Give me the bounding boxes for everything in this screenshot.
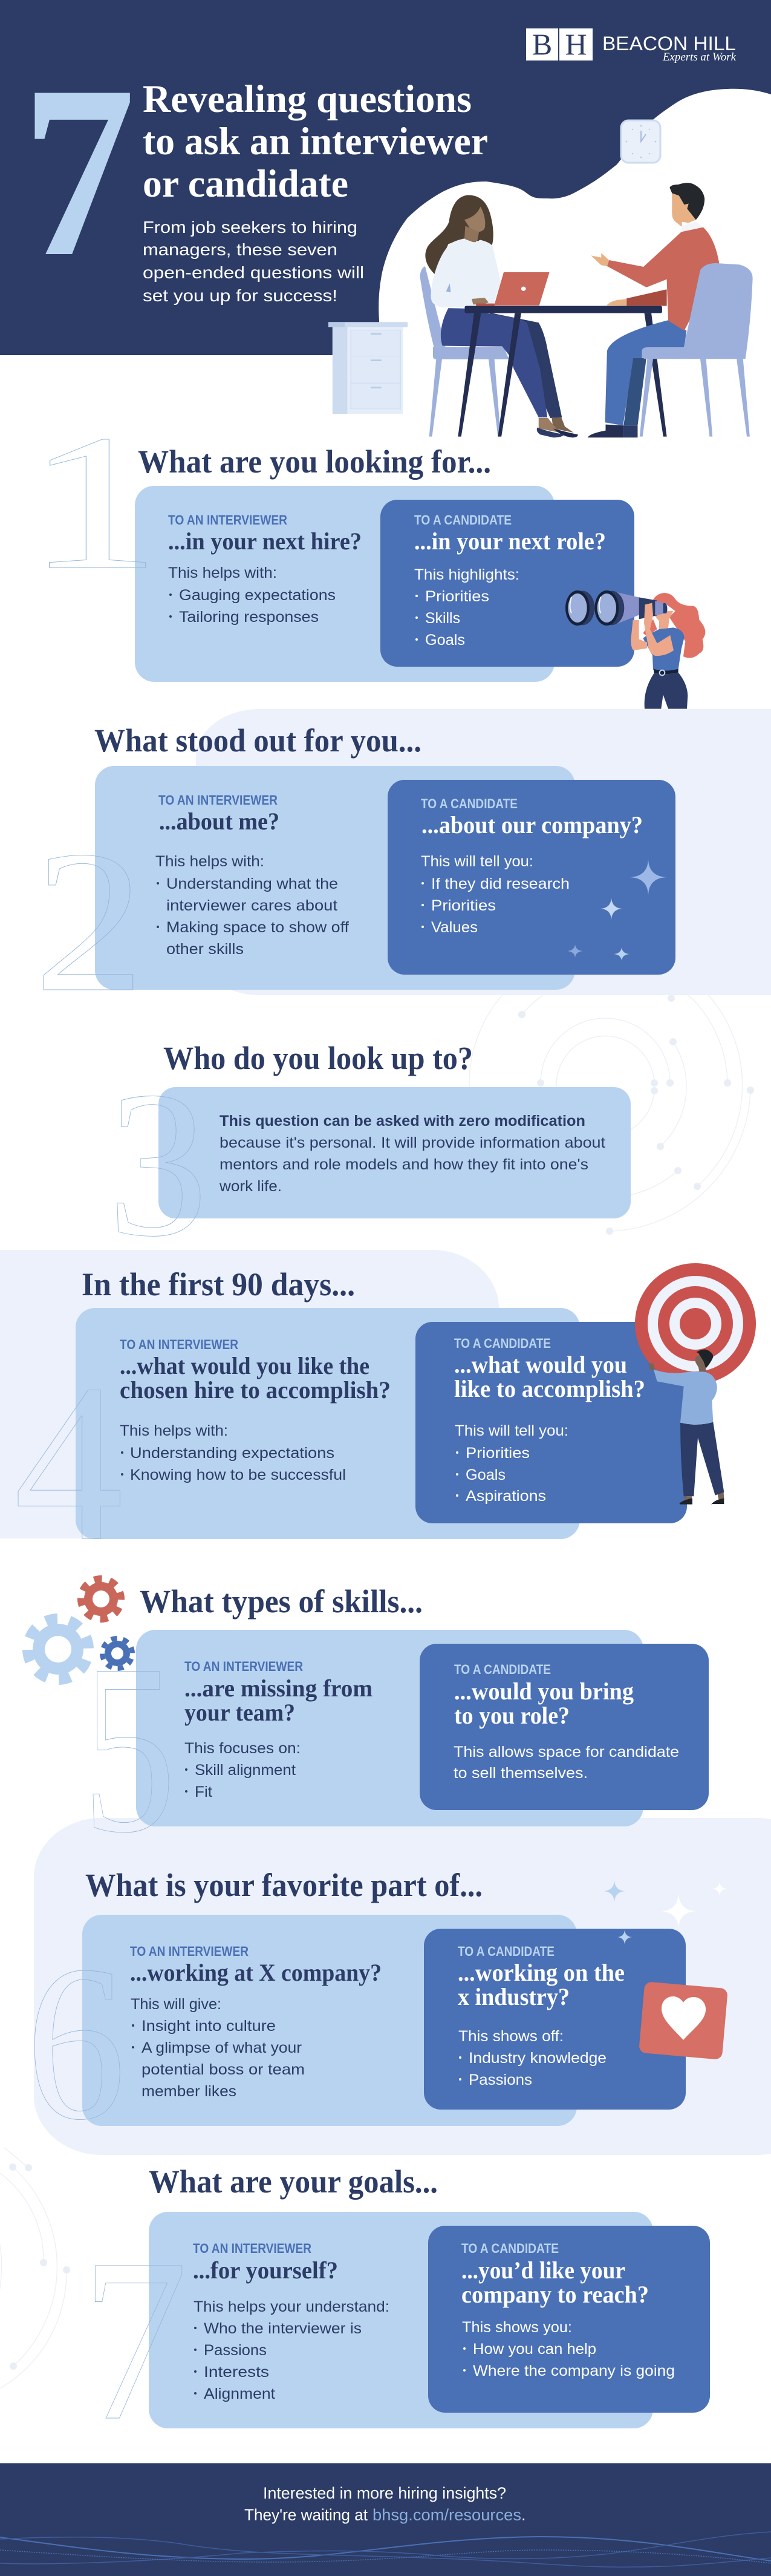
logo: B <box>532 27 552 61</box>
illustration: person holding target <box>649 1350 724 1505</box>
intro text: From job seekers to hiring <box>143 218 357 237</box>
interviewer text: Insight into culture <box>142 2018 276 2035</box>
candidate text: x industry? <box>458 1983 570 2010</box>
big number 7: 7 <box>22 35 135 308</box>
header background with white blob <box>0 0 771 355</box>
table top <box>464 306 662 313</box>
section 2 <box>34 722 675 1034</box>
candidate text: How you can help <box>473 2341 596 2358</box>
heading: What is your favorite part of... <box>85 1867 483 1903</box>
interviewer text <box>120 1337 391 1483</box>
panel: interviewer <box>76 1308 580 1539</box>
interviewer text: TO AN INTERVIEWER <box>168 512 287 528</box>
call to action text: Interested in more hiring insights? <box>263 2484 506 2502</box>
icon: wall clock <box>621 120 660 163</box>
candidate text: TO A CANDIDATE <box>458 1944 555 1959</box>
decorative circuit dots <box>518 995 754 1235</box>
interviewer text: Understanding what the <box>166 875 338 892</box>
number 1: 1 <box>25 395 162 610</box>
interviewer text: potential boss or team <box>142 2061 305 2078</box>
heading: Who do you look up to? <box>163 1040 473 1076</box>
panel: interviewer <box>136 1630 643 1826</box>
section 6 <box>26 1867 728 2166</box>
interviewer text: Passions <box>204 2342 267 2359</box>
candidate text: ...what would you <box>454 1351 627 1378</box>
candidate text: ...you’d like your <box>461 2257 625 2284</box>
decorative section 2 background <box>196 709 771 995</box>
candidate text: Priorities <box>466 1445 530 1462</box>
panel: candidate <box>424 1929 686 2110</box>
panel: interviewer <box>82 1915 577 2126</box>
interviewer text: Alignment <box>204 2385 275 2402</box>
candidate text: like to accomplish? <box>454 1375 645 1402</box>
section 5 <box>18 1574 709 1883</box>
title: Revealing questions <box>143 77 472 121</box>
heading: What are you looking for... <box>138 443 491 480</box>
interviewer text: This focuses on: <box>184 1740 301 1757</box>
interviewer text: ...what would you like the <box>120 1352 369 1379</box>
body text: mentors and role models and how they fit into one's <box>220 1156 588 1173</box>
interviewer text: TO AN INTERVIEWER <box>120 1337 238 1352</box>
candidate text: This will tell you: <box>455 1422 568 1439</box>
candidate text <box>458 1944 625 2088</box>
candidate text: ...working on the <box>458 1959 625 1986</box>
table legs <box>458 313 667 437</box>
body text <box>219 1113 605 1195</box>
number 3: 3 <box>108 1048 208 1280</box>
interviewer text <box>193 2241 389 2402</box>
interviewer text: chosen hire to accomplish? <box>120 1376 391 1404</box>
footer <box>0 2463 771 2576</box>
interviewer text: Gauging expectations <box>179 587 336 604</box>
candidate text: to you role? <box>454 1702 570 1729</box>
decorative circuit arcs bottom left <box>0 2148 70 2388</box>
icon: sparkles <box>603 1880 727 1944</box>
panel <box>158 1087 631 1218</box>
interviewer text: ...are missing from <box>184 1675 372 1702</box>
candidate text: This will tell you: <box>421 853 533 870</box>
candidate text: If they did research <box>431 875 570 892</box>
interviewer text: member likes <box>142 2083 236 2100</box>
interviewer text: This will give: <box>131 1996 221 2013</box>
interviewer text: Interests <box>204 2364 269 2381</box>
woman's chair <box>420 266 509 437</box>
interviewer text: Skill alignment <box>195 1762 296 1779</box>
logo <box>526 27 737 64</box>
decorative section 4 background <box>0 1250 499 1538</box>
candidate text: Priorities <box>431 897 496 914</box>
panel: interviewer <box>95 766 575 990</box>
candidate text: TO A CANDIDATE <box>414 512 512 528</box>
man's chair <box>640 263 753 437</box>
candidate text: Where the company is going <box>473 2362 675 2379</box>
decorative waves <box>0 2532 771 2567</box>
candidate text: This allows space for candidate <box>454 1744 679 1760</box>
candidate text: This highlights: <box>414 566 519 583</box>
title <box>143 77 488 206</box>
interviewer text <box>130 1944 382 2100</box>
interviewer text: ...about me? <box>159 808 279 835</box>
panel: candidate <box>388 780 675 975</box>
logo: Experts at Work <box>662 51 737 64</box>
number 5: 5 <box>82 1614 176 1883</box>
heading: What types of skills... <box>140 1583 423 1620</box>
call to action text: . <box>521 2506 526 2524</box>
candidate text: TO A CANDIDATE <box>461 2241 559 2256</box>
heading: What stood out for you... <box>94 722 421 759</box>
candidate text: to sell themselves. <box>454 1765 588 1782</box>
interviewer text: Knowing how to be successful <box>130 1466 346 1483</box>
candidate text: TO A CANDIDATE <box>454 1662 551 1677</box>
interviewer text: ...for yourself? <box>193 2257 338 2284</box>
panel: candidate <box>415 1322 687 1523</box>
candidate text: Passions <box>469 2071 532 2088</box>
interviewer text: TO AN INTERVIEWER <box>193 2241 311 2256</box>
candidate text: This shows off: <box>458 2028 564 2045</box>
call to action text: bhsg.com/resources <box>372 2506 521 2524</box>
illustration: interview at a table <box>420 183 753 437</box>
candidate text: ...about our company? <box>421 811 643 839</box>
number 6: 6 <box>26 1920 126 2166</box>
logo: H <box>565 27 587 61</box>
panel: candidate <box>380 500 634 667</box>
heading: What are your goals... <box>149 2163 438 2200</box>
interviewer text: other skills <box>166 941 244 958</box>
interviewer text: A glimpse of what your <box>142 2039 302 2056</box>
icon: light blue gear <box>18 1609 98 1689</box>
panel: interviewer <box>149 2212 653 2428</box>
icon: red gear <box>76 1574 126 1624</box>
icon: sparkles <box>567 859 667 961</box>
candidate text: Goals <box>425 632 465 649</box>
number 4: 4 <box>14 1338 123 1587</box>
interviewer text <box>155 793 349 958</box>
section 4 <box>14 1263 756 1587</box>
number 7: 7 <box>81 2211 188 2469</box>
candidate text: TO A CANDIDATE <box>421 796 518 811</box>
call to action text: They're waiting at <box>244 2506 368 2524</box>
decorative section 6 background <box>34 1818 771 2155</box>
candidate text: This shows you: <box>462 2319 572 2336</box>
call to action text <box>244 2484 526 2524</box>
icon: heart badge <box>639 1981 728 2060</box>
interviewer text: TO AN INTERVIEWER <box>184 1659 303 1674</box>
candidate text <box>461 2241 675 2379</box>
candidate text: Values <box>431 919 478 936</box>
panel: candidate <box>428 2226 710 2413</box>
heading: In the first 90 days... <box>82 1266 355 1303</box>
interviewer text: Making space to show off <box>166 919 349 936</box>
candidate text: ...would you bring <box>454 1678 634 1705</box>
interviewer text <box>184 1659 372 1800</box>
candidate text: Skills <box>425 610 460 627</box>
interviewer text: This helps your understand: <box>194 2298 389 2315</box>
interviewer text: This helps with: <box>120 1422 228 1439</box>
man <box>588 183 719 437</box>
interviewer text: your team? <box>184 1699 295 1726</box>
body text: work life. <box>219 1178 282 1195</box>
section 7 <box>81 2163 710 2469</box>
title: to ask an interviewer <box>143 120 488 163</box>
interviewer text: TO AN INTERVIEWER <box>130 1944 249 1959</box>
candidate text <box>414 512 606 649</box>
body text: because it's personal. It will provide information about <box>220 1134 605 1151</box>
number 2: 2 <box>34 809 145 1034</box>
candidate text: ...in your next role? <box>414 528 606 555</box>
intro text: open-ended questions will <box>143 263 364 282</box>
intro text: set you up for success! <box>143 286 337 305</box>
icon: blue gear <box>97 1633 137 1673</box>
logo: BEACON HILL <box>602 33 736 54</box>
interviewer text: interviewer cares about <box>166 897 337 914</box>
interviewer text <box>168 512 362 626</box>
interviewer text: Fit <box>195 1783 212 1800</box>
interviewer text: Understanding expectations <box>130 1445 334 1462</box>
woman <box>425 195 578 437</box>
body text: This question can be asked with zero modification <box>220 1113 585 1129</box>
interviewer text: This helps with: <box>155 853 264 870</box>
interviewer text: This helps with: <box>168 564 277 581</box>
panel: candidate <box>420 1644 709 1810</box>
interviewer text: Who the interviewer is <box>204 2320 362 2337</box>
candidate text: Industry knowledge <box>469 2050 607 2067</box>
intro text: managers, these seven <box>143 240 337 259</box>
candidate text: Priorities <box>425 588 489 605</box>
panel: interviewer <box>135 486 555 682</box>
interviewer text: Tailoring responses <box>179 609 319 626</box>
icon: target <box>635 1263 756 1384</box>
binocular lenses <box>565 590 624 626</box>
illustration: file cabinet <box>328 322 408 414</box>
candidate text: TO A CANDIDATE <box>454 1336 551 1351</box>
interviewer text: ...working at X company? <box>130 1959 382 1986</box>
candidate text: Aspirations <box>466 1488 546 1505</box>
candidate text: Goals <box>466 1466 506 1483</box>
candidate text <box>454 1662 679 1782</box>
interviewer text: ...in your next hire? <box>168 528 362 555</box>
decorative circuit arcs top right <box>469 992 750 1231</box>
interviewer text: TO AN INTERVIEWER <box>158 793 278 808</box>
laptop <box>476 272 550 306</box>
section 3 <box>108 1040 631 1280</box>
candidate text: company to reach? <box>461 2281 649 2308</box>
illustration: woman with binoculars <box>565 590 705 709</box>
candidate text <box>454 1336 645 1505</box>
title: or candidate <box>143 162 348 206</box>
candidate text <box>421 796 643 936</box>
section 1 <box>25 395 705 709</box>
intro text <box>143 218 364 305</box>
